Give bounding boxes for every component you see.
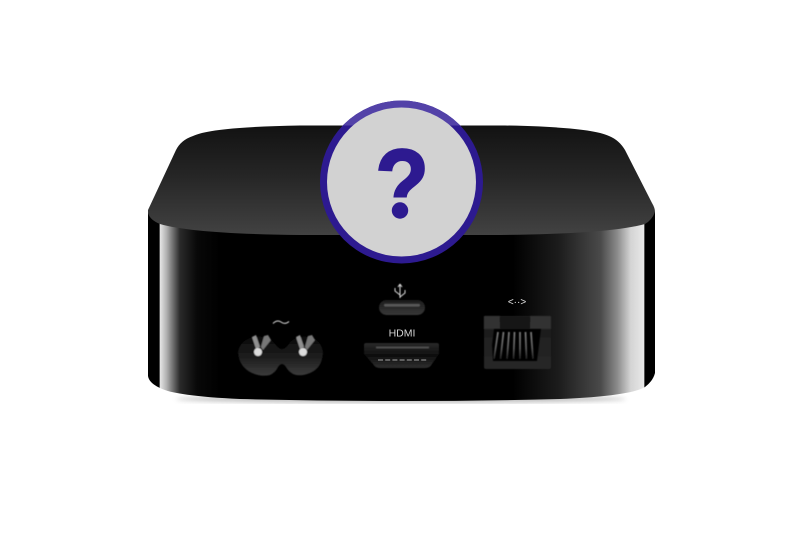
badge outer ring [320,100,483,264]
question badge [320,100,483,264]
power port [238,321,323,376]
device shadow [176,395,626,403]
badge ring highlight over white background [342,100,460,126]
HDMI port [364,328,439,368]
badge face [327,108,476,256]
usb-c socket [379,300,425,315]
question mark: ? [375,130,429,239]
device top plate [148,126,655,235]
square dot cover [384,198,420,222]
ethernet contacts [494,332,533,359]
illustration: Apple TV rear view with question badge [148,100,655,404]
HDMI label: HDMI [389,328,415,340]
ethernet symbol: <··> [508,297,526,308]
usb symbol [395,284,405,298]
ethernet socket [484,316,551,369]
round dot [392,202,408,219]
left power pin [252,335,271,356]
device body [148,212,655,401]
power symbol [273,321,289,324]
USB-C port [379,284,425,315]
power socket [238,337,323,376]
right power pin [296,335,315,356]
ethernet port [484,297,551,369]
HDMI socket [364,343,439,368]
